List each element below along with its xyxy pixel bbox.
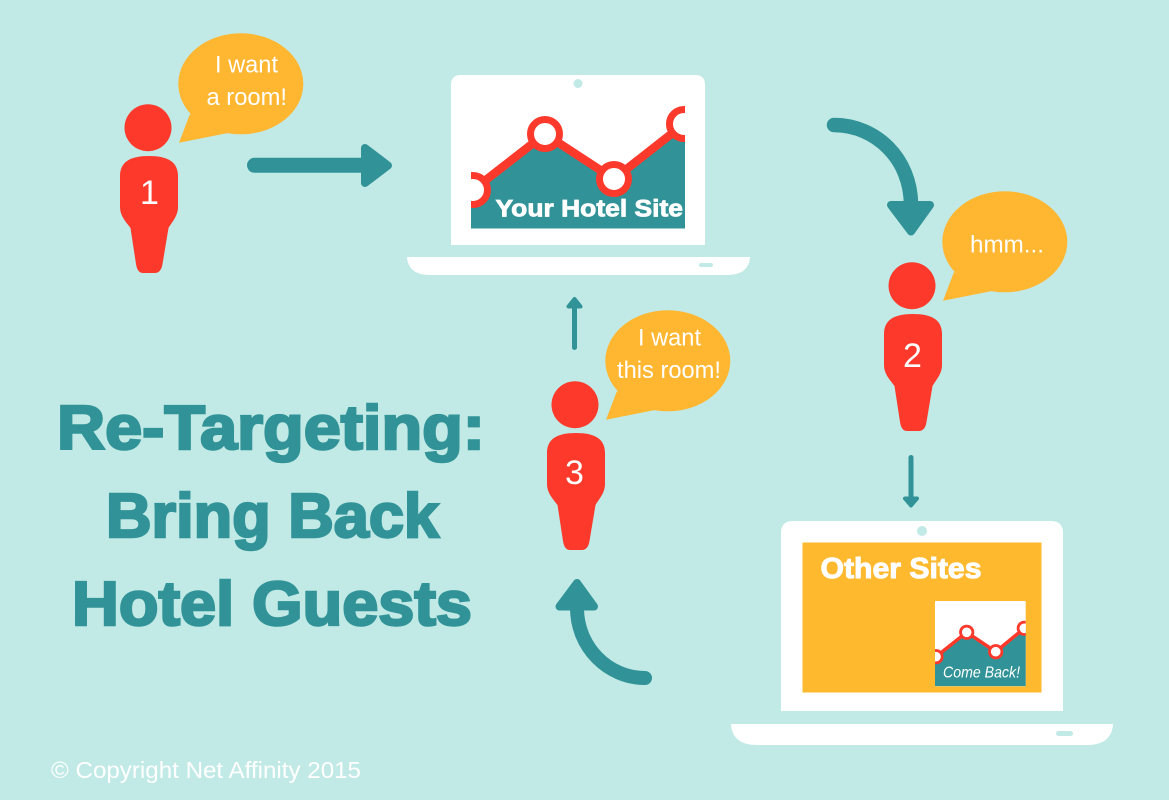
laptop camera	[574, 79, 582, 88]
person 3	[547, 381, 605, 550]
title: Bring Back	[106, 482, 440, 551]
laptop slot	[699, 263, 713, 267]
speech bubble 2: hmm...	[970, 232, 1044, 259]
person 1: 1	[140, 174, 159, 212]
label: other sites: Other Sites	[820, 553, 982, 585]
laptop camera	[917, 526, 927, 536]
title: Hotel Guests	[72, 570, 472, 639]
speech bubble 3: this room!	[617, 357, 721, 384]
arrow: curved, other sites to person 3	[560, 583, 645, 678]
arrow: person 2 to other sites	[905, 458, 917, 506]
arrow: curved, hotel site to person 2	[834, 125, 930, 232]
line chart: your hotel site	[458, 110, 698, 228]
laptop: other sites	[731, 521, 1113, 745]
person 3: 3	[565, 454, 584, 492]
speech bubble 3: I want	[638, 325, 701, 352]
speech bubble 1	[178, 33, 303, 143]
person 2: 2	[903, 337, 922, 375]
laptop screen	[451, 75, 705, 245]
speech bubble 1: a room!	[206, 84, 287, 111]
laptop screen	[781, 521, 1063, 711]
laptop base	[407, 257, 750, 275]
laptop base	[731, 724, 1113, 745]
arrow: person 3 to hotel site	[568, 299, 580, 348]
copyright: © Copyright Net Affinity 2015	[51, 757, 361, 783]
arrow: visitor to hotel site	[254, 148, 388, 183]
orange web page	[802, 542, 1042, 692]
laptop: your hotel site	[407, 75, 750, 275]
title: Re-Targeting:	[57, 394, 485, 463]
speech bubble 3	[605, 310, 730, 420]
speech bubble 1: I want	[215, 52, 278, 79]
person 1	[120, 104, 178, 273]
title	[57, 394, 485, 639]
label: your hotel site: Your Hotel Site	[496, 196, 683, 222]
laptop slot	[1056, 731, 1073, 736]
speech bubble 2	[942, 191, 1067, 301]
banner ad: come back	[930, 601, 1030, 686]
banner ad: come back: Come Back!	[943, 664, 1020, 682]
person 2	[884, 262, 942, 431]
